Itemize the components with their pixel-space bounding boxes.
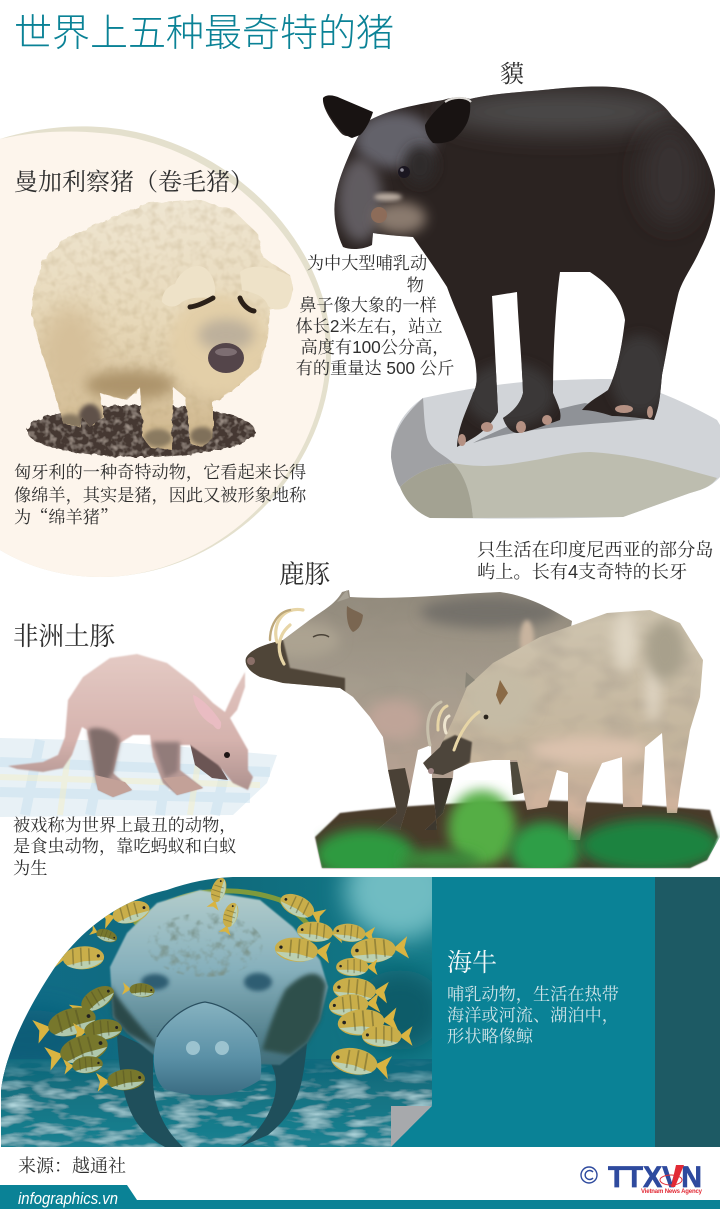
mossy back edge: [133, 888, 309, 926]
fish: [32, 876, 412, 1093]
eyes: [190, 298, 213, 307]
text: aardvark description: 被戏称为世界上最丑的动物，: [13, 815, 236, 835]
panel: manatee: [1, 877, 720, 1147]
text: aardvark description: 为生: [13, 858, 47, 878]
tusks: [270, 609, 303, 664]
text: Mangalica description: 匈牙利的一种奇特动物，它看起来长得: [14, 462, 306, 482]
text: manatee description: 哺乳动物，生活在热带: [447, 984, 619, 1004]
text: aardvark description: [13, 815, 236, 878]
ears: [323, 95, 373, 138]
text: manatee description: 海洋或河流、湖泊中，: [447, 1005, 619, 1025]
logo: TTXVN: Vietnam News Agency: [641, 1189, 703, 1195]
ground under pig: [27, 405, 255, 457]
copyright symbol: [581, 1167, 597, 1183]
text: Mangalica description: [14, 462, 307, 528]
photo: Mangalica pig: [32, 200, 293, 450]
text: manatee description: [447, 984, 619, 1046]
logo: TTXVN: TTXVN: [608, 1161, 702, 1194]
text: tapir description: 体长2米左右，站立: [295, 316, 443, 336]
tusks: [428, 702, 479, 750]
text: tapir description: 高度有100公分高，: [300, 337, 450, 357]
heading: aardvark: 非洲土豚: [13, 623, 116, 651]
teal panel: [432, 877, 655, 1147]
mud on snout: [423, 734, 473, 775]
ears: [162, 266, 215, 306]
heading: manatee: 海牛: [447, 949, 497, 977]
title: 世界上五种最奇特的猪: [14, 13, 394, 55]
text: tapir description: 鼻子像大象的一样: [299, 295, 437, 315]
teal fold corner: [391, 1106, 432, 1147]
ground: [315, 800, 718, 868]
photo: babirusa (small): [418, 605, 710, 845]
flippers: [117, 1033, 183, 1147]
text: babirusa description: 只生活在印度尼西亚的部分岛: [477, 540, 713, 560]
toes: [458, 405, 653, 446]
panel: aardvark: [0, 623, 277, 878]
text: tapir description: [295, 253, 454, 378]
source: 来源：越通社: [18, 1156, 126, 1176]
text: tapir description: 有的重量达 500 公斤: [296, 358, 454, 378]
heading: babirusa: 鹿豚: [279, 561, 331, 589]
text: tapir description: 为中大型哺乳动: [307, 253, 427, 273]
snout: [208, 343, 244, 373]
heading: Mangalica: 曼加利察猪（卷毛猪）: [14, 169, 254, 196]
text: tapir description: 物: [407, 275, 424, 295]
text: Mangalica description: 像绵羊，其实是猪，因此又被形象地称: [14, 485, 307, 505]
feet: [95, 775, 132, 797]
footer site name: infographics.vn: [18, 1190, 118, 1208]
sea floor: [0, 1060, 432, 1147]
manatee body: [110, 890, 328, 1065]
page fold: [391, 1106, 432, 1147]
rock base: [391, 379, 720, 519]
mud on snout and jaw: [240, 640, 345, 695]
text: aardvark description: 是食虫动物，靠吃蚂蚁和白蚁: [13, 836, 236, 856]
panel: Mangalica pig: [0, 126, 331, 577]
panel: babirusa: [240, 540, 720, 881]
sea floor fade: [0, 1059, 432, 1091]
snout: [371, 207, 387, 223]
text: manatee description: 形状略像鲸: [447, 1026, 534, 1046]
ear: [193, 695, 221, 729]
panel: tapir: [295, 61, 720, 519]
text: babirusa description: [477, 540, 713, 582]
muzzle: [154, 1002, 261, 1095]
footer bar: [0, 1185, 720, 1209]
photo: aardvark: [8, 654, 253, 797]
foliage: [315, 790, 720, 881]
text: babirusa description: 屿上。长有4支奇特的长牙: [477, 562, 687, 582]
photo: tapir: [320, 84, 720, 449]
heading: tapir: 貘: [500, 61, 524, 88]
eye: [398, 166, 410, 178]
mud on legs: [377, 768, 410, 830]
text: Mangalica description: 为“绵羊猪”: [14, 503, 117, 528]
dark side strip: [655, 877, 720, 1147]
blanket: [0, 738, 277, 817]
photo: manatee underwater: [1, 877, 432, 1147]
beige background circle: [0, 126, 331, 577]
photo: babirusa (large): [240, 585, 580, 835]
